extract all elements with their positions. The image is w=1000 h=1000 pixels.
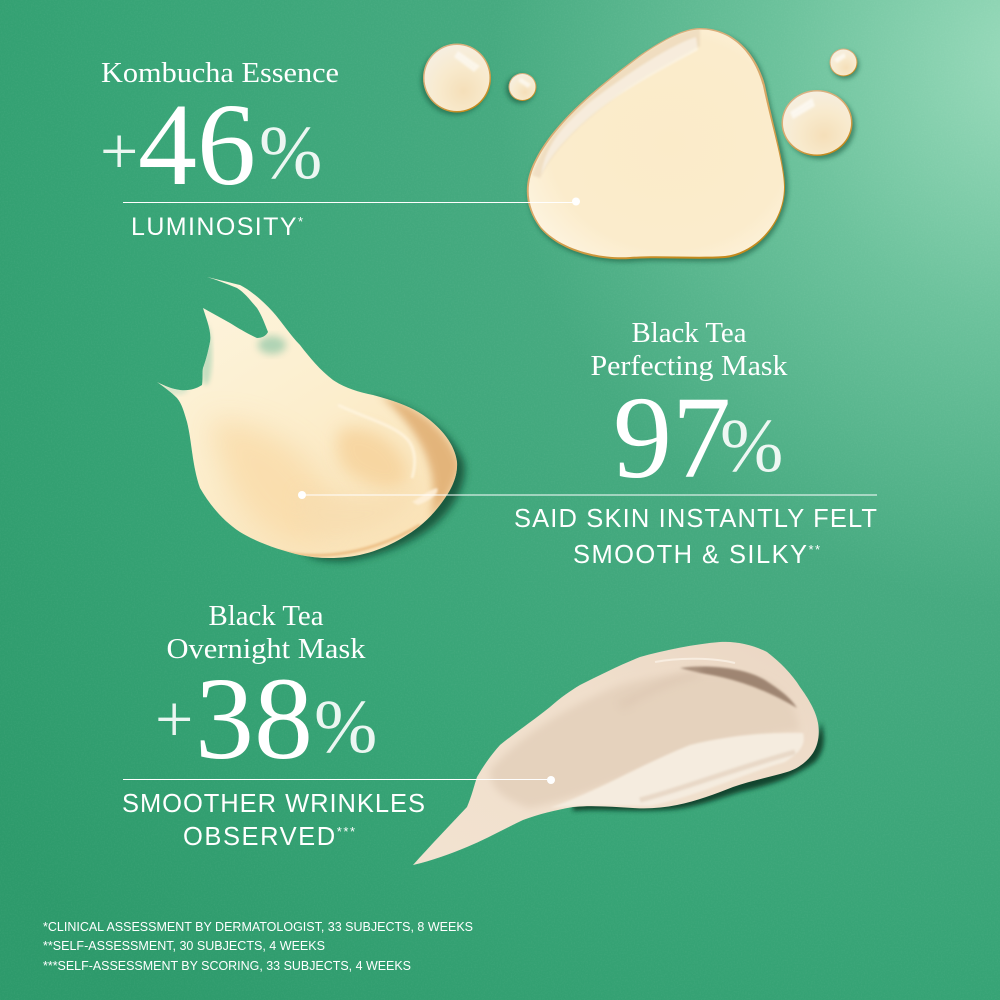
stat: 97 percent: % — [720, 404, 783, 488]
label: luminosity: * — [298, 214, 303, 229]
label: luminosity: LUMINOSITY — [131, 213, 297, 241]
icon: droplet right small — [830, 48, 859, 79]
text block: Kombucha Essence — [100, 57, 339, 241]
stat: plus 38 percent: 38 — [195, 653, 313, 784]
heading: product name line 2: Overnight Mask — [166, 633, 366, 665]
connector: luminosity — [123, 198, 580, 206]
footnotes — [43, 920, 473, 973]
icon: perfecting mask swatch — [156, 277, 465, 561]
footnote 3: ***SELF-ASSESSMENT BY SCORING, 33 SUBJECTS, 4 WEEKS — [43, 959, 411, 973]
heading: product name line 1: Black Tea — [208, 600, 324, 632]
text block: Black Tea Perfecting Mask — [514, 317, 877, 569]
icon: overnight mask swatch — [413, 642, 824, 865]
stat: plus 46 percent: % — [259, 111, 322, 195]
footnote 1: *CLINICAL ASSESSMENT BY DERMATOLOGIST, 33 SUBJECTS, 8 WEEKS — [43, 920, 473, 934]
label: smoother wrinkles: SMOOTHER WRINKLES — [122, 790, 425, 818]
icon: droplet left large — [421, 44, 491, 115]
icon: essence droplets — [421, 28, 859, 262]
label: observed: *** — [337, 824, 355, 839]
label: said skin instantly felt: SAID SKIN INSTANTLY FELT — [514, 505, 877, 533]
footnote 2: **SELF-ASSESSMENT, 30 SUBJECTS, 4 WEEKS — [43, 939, 325, 953]
icon: droplet right large — [782, 90, 855, 159]
stat: 97 percent: 97 — [613, 372, 731, 503]
heading: product name line 2: Perfecting Mask — [590, 350, 788, 382]
text block: Black Tea Overnight Mask — [122, 600, 425, 851]
label: observed: OBSERVED — [183, 823, 335, 851]
stat: plus 38 percent: % — [314, 685, 377, 769]
connector: smooth and silky — [298, 491, 877, 499]
icon: droplet left small — [506, 73, 536, 104]
connector: wrinkles — [123, 776, 555, 784]
stat: plus 46 percent: + — [100, 113, 138, 189]
stat: plus 46 percent: 46 — [138, 79, 256, 210]
label: smooth and silky: ** — [808, 542, 820, 557]
stat: plus 38 percent: + — [155, 681, 193, 757]
icon: large essence pool — [527, 28, 788, 262]
heading: product name line 1: Black Tea — [632, 317, 747, 349]
heading: product name: Kombucha Essence — [101, 57, 339, 89]
label: smooth and silky: SMOOTH & SILKY — [573, 541, 807, 569]
